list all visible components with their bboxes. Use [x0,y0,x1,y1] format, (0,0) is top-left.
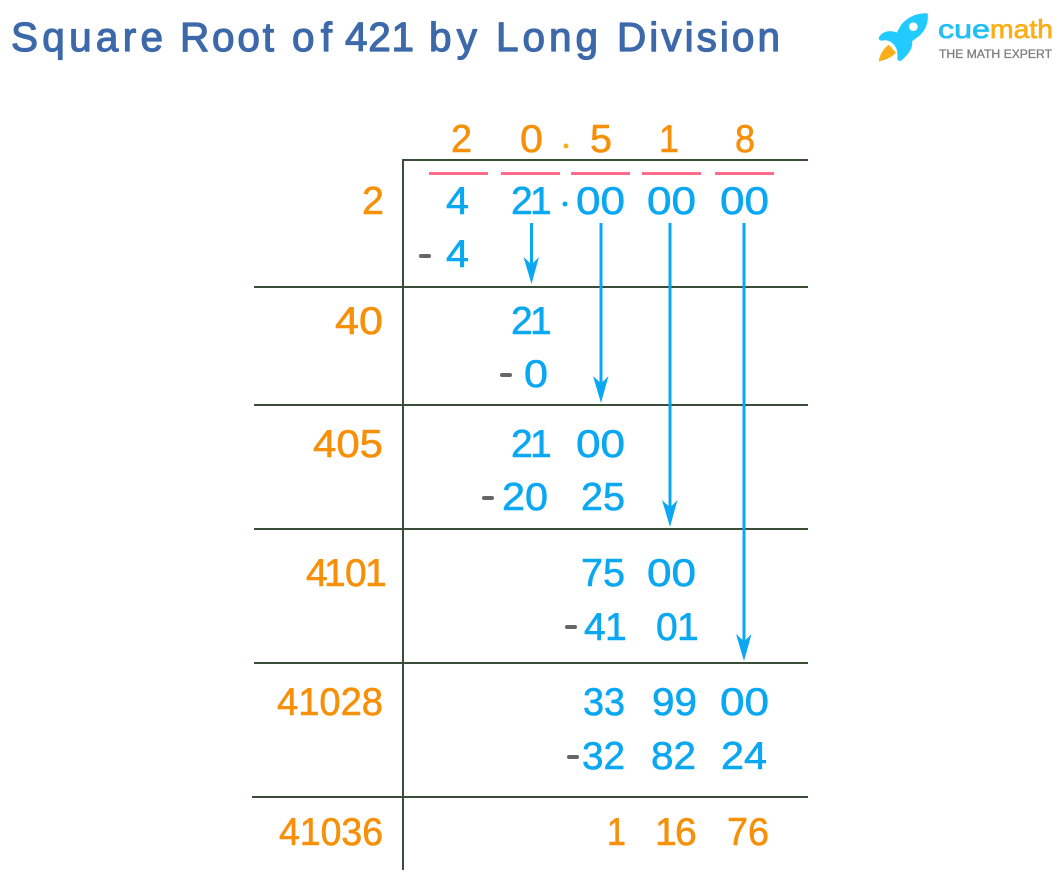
working digits: 00 [576,180,625,223]
title: Division [617,14,780,60]
quotient digits: 0 [520,118,543,161]
working digits: 00 [647,180,696,223]
working digits: 21 [511,300,552,343]
working digits: 4 [446,180,469,223]
quotient digits: 5 [590,118,612,161]
quotient digits: 8 [735,118,755,161]
remainder digits [607,811,769,854]
arrow: bring down first 00 [593,223,608,403]
arrow: bring down second 00 [662,223,678,527]
working digits: 01 [656,606,699,649]
title: 421 [345,14,414,60]
working digits: 21 [511,423,552,466]
working digits: 00 [647,552,696,595]
working digits: 20 [502,476,548,519]
logo: cuemath: math [990,14,1053,44]
divisor column: 4101 [306,552,387,595]
title: by [429,14,478,60]
working digits: 82 [651,735,696,778]
division frame lines [252,159,808,870]
working digits: 00 [720,681,769,724]
divisor column: 2 [362,180,384,223]
working digits: 00 [720,180,769,223]
pink digit-pair bars [429,172,774,175]
arrows [524,223,752,661]
quotient digits: 2 [451,118,472,161]
divisor column: 40 [335,300,383,343]
title: Square [11,14,163,60]
working digits: 41 [584,606,627,649]
working digits: 4 [446,233,469,276]
working digits [446,180,769,778]
divisor column: 41028 [277,681,383,724]
working digits: 32 [582,735,625,778]
arrow: bring down 21 [524,223,539,284]
remainder digits: 76 [727,811,769,854]
divisor column [277,180,387,854]
wordmark: cue [938,14,990,44]
divisor column: 41036 [279,811,383,854]
remainder digits: 16 [655,811,697,854]
title: Long [496,14,598,60]
working digits: 25 [581,476,625,519]
working digits: 00 [576,423,625,466]
tagline: THE MATH EXPERT [939,47,1053,61]
working digits: 75 [581,552,625,595]
divisor column: 405 [313,423,383,466]
arrow: bring down third 00 [736,223,752,661]
working digits: 33 [583,681,625,724]
working digits: 99 [652,681,697,724]
working digits: 24 [721,735,767,778]
minus signs [419,254,579,759]
title [11,14,780,60]
working digits: 0 [524,353,548,396]
remainder digits: 1 [607,811,626,854]
working digits: 21 [511,180,552,223]
quotient digits [451,118,755,161]
quotient digits: 1 [659,118,679,161]
icon: rocket [879,13,928,61]
title: of [292,14,333,60]
title: Root [180,14,274,60]
logo: cuemath [879,13,1053,61]
